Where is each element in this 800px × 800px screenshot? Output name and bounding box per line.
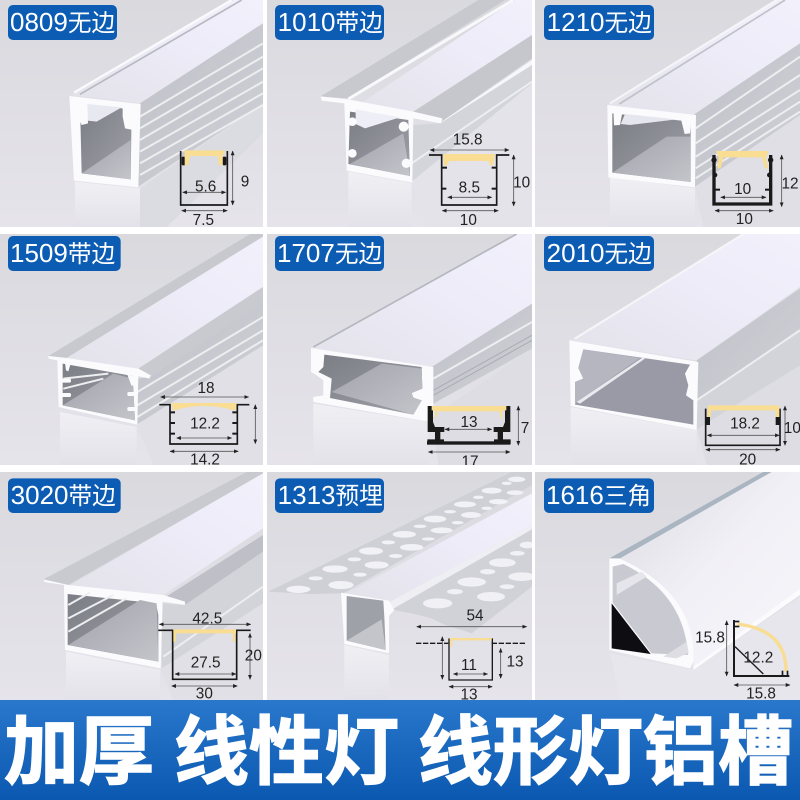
dimension diagram 1313: 13 (506, 654, 524, 671)
aluminium profile 3020 (43, 472, 263, 700)
label 1010带边: 1010带边 (278, 7, 383, 37)
dimension diagram 0809: 7.5 (193, 212, 214, 229)
dimension diagram 1313: 54 (466, 608, 484, 625)
dimension diagram 1210: 10 (736, 211, 753, 228)
dimension diagram 1509 (159, 380, 255, 468)
title banner: 线性灯 (174, 710, 399, 794)
aluminium profile 2010 (569, 234, 800, 465)
aluminium profile 1707 (311, 234, 532, 465)
dimension diagram 3020 (158, 610, 262, 702)
aluminium profile 1509 (48, 234, 263, 465)
dimension diagram 1707: 13 (460, 414, 478, 431)
dimension diagram 1616: 12.2 (743, 650, 773, 667)
dimension diagram 3020: 20 (245, 648, 262, 665)
panel: 1313预埋 (267, 472, 532, 703)
title banner (0, 700, 800, 800)
panel: 3020带边 (0, 472, 263, 702)
aluminium corner profile 1616 (609, 472, 800, 700)
label 0809无边: 0809无边 (10, 7, 116, 37)
panel: 1616三角 (535, 472, 800, 702)
dimension diagram 1210: 10 (734, 181, 751, 198)
dimension diagram 1509: 18 (197, 380, 215, 397)
aluminium profile 1010 (320, 0, 532, 227)
dimension diagram 1707: 17 (461, 453, 479, 470)
dimension diagram 0809: 9 (241, 174, 249, 191)
dimension diagram 1010: 15.8 (453, 131, 483, 148)
label 1616三角: 1616三角 (546, 480, 651, 510)
dimension diagram 3020: 30 (196, 685, 213, 702)
title banner: 线形灯铝槽 (418, 710, 793, 794)
dimension diagram 1010 (429, 131, 530, 229)
dimension diagram 1616: 15.8 (746, 685, 776, 702)
label 1509带边: 1509带边 (10, 238, 116, 268)
panel: 1010带边 (267, 0, 532, 229)
dimension diagram 1010: 10 (460, 212, 477, 229)
panel: 2010无边 (535, 234, 800, 468)
dimension diagram 1707 (427, 406, 529, 470)
panel: 0809无边 (0, 0, 263, 229)
label 2010无边: 2010无边 (547, 238, 652, 268)
label 3020带边: 3020带边 (11, 480, 116, 510)
label 1210无边: 1210无边 (547, 7, 652, 37)
dimension diagram 0809 (181, 150, 249, 229)
dimension diagram 1616: 15.8 (695, 630, 725, 647)
panel: 1210无边 (535, 0, 800, 228)
dimension diagram 2010: 18.2 (730, 416, 760, 433)
dimension diagram 1010: 8.5 (459, 180, 480, 197)
perforated profile 1313 (268, 472, 536, 700)
dimension diagram 1707: 7 (521, 420, 529, 437)
dimension diagram 1509: 12.2 (190, 416, 220, 433)
label 1707无边: 1707无边 (277, 238, 383, 268)
panel: 1509带边 (0, 234, 263, 468)
dimension diagram 3020: 27.5 (191, 654, 221, 671)
dimension diagram 1616 (695, 620, 790, 702)
dimension diagram 1210 (711, 151, 799, 228)
aluminium profile 1210 (607, 0, 800, 227)
dimension diagram 1313: 13 (460, 686, 478, 703)
dimension diagram 1010: 10 (513, 175, 530, 192)
panel: 1707无边 (267, 234, 532, 470)
title banner: 加厚 (4, 710, 154, 794)
dimension diagram 1313: 11 (461, 657, 477, 674)
aluminium profile 0809 (69, 0, 263, 227)
dimension diagram 1210: 12 (781, 175, 799, 192)
dimension diagram 2010 (706, 405, 800, 468)
dimension diagram 0809: 5.6 (195, 178, 216, 195)
dimension diagram 1509: 14.2 (190, 451, 220, 468)
label 1313预埋: 1313预埋 (278, 480, 383, 510)
dimension diagram 3020: 42.5 (192, 610, 222, 627)
dimension diagram 2010: 20 (739, 451, 756, 468)
dimension diagram 1313 (416, 608, 527, 703)
